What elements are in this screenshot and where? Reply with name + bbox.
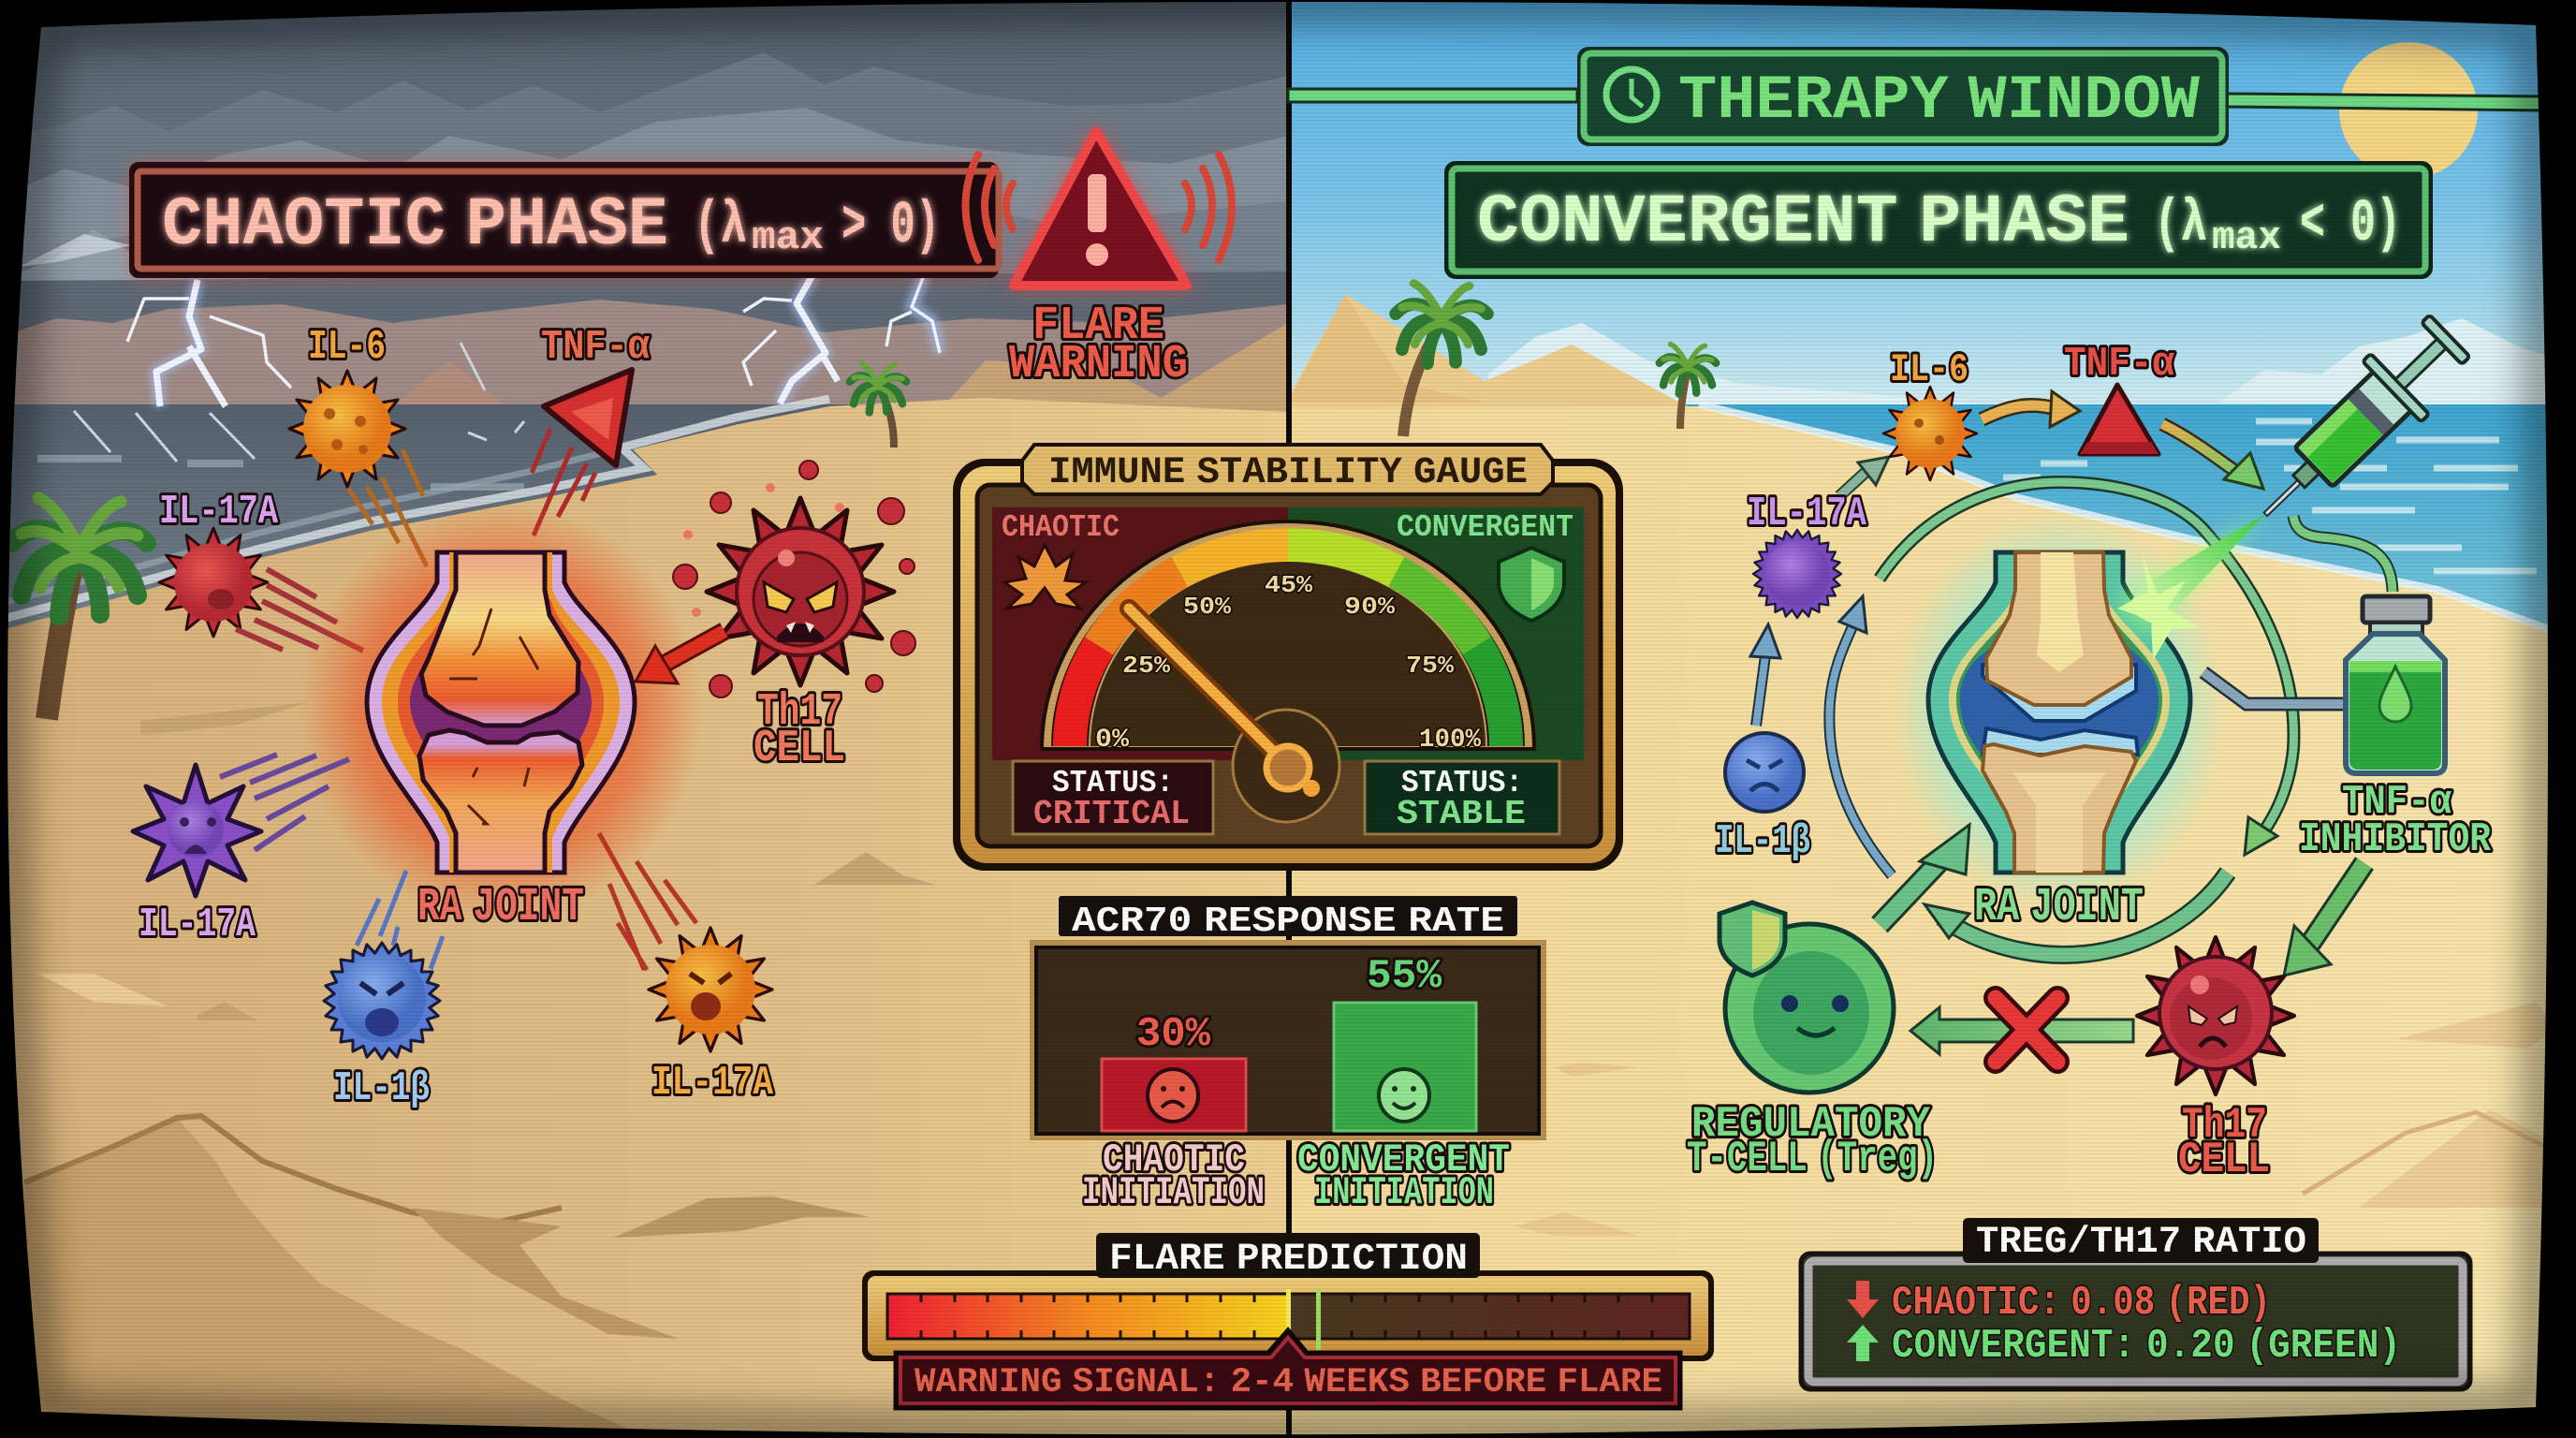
bar: convergent 55%: 55% bbox=[1367, 953, 1442, 1000]
label: chaotic initiation bbox=[1082, 1137, 1265, 1215]
joint: convergent RA joint bbox=[1893, 510, 2226, 913]
cytokine: IL-6 chaotic bbox=[289, 324, 427, 566]
banner: chaotic phase bbox=[131, 164, 999, 276]
label: convergent initiation: CONVERGENT bbox=[1297, 1137, 1510, 1182]
label: TNF-alpha inhibitor: TNF-α bbox=[2342, 779, 2452, 826]
icon: explosion bbox=[1004, 545, 1086, 609]
status: critical: STATUS: bbox=[1052, 766, 1174, 800]
banner: therapy window: THERAPY WINDOW bbox=[1678, 66, 2200, 136]
cytokine: IL-6 convergent: IL-6 bbox=[1890, 347, 1969, 392]
gauge display: 90% bbox=[1344, 593, 1395, 621]
text: convergent ratio: CONVERGENT: 0.20 (GREEN) bbox=[1892, 1323, 2401, 1370]
banner: convergent phase: (λ bbox=[2154, 191, 2207, 258]
panel: flare prediction bbox=[862, 1233, 1714, 1408]
heading: ratio: TREG/TH17 RATIO bbox=[1976, 1222, 2306, 1264]
icon: flare warning triangle bbox=[966, 124, 1232, 289]
text: chaotic ratio: CHAOTIC: 0.08 (RED) bbox=[1892, 1280, 2271, 1327]
label: RA joint chaotic: RA JOINT bbox=[417, 881, 584, 934]
bar: chaotic 30% bbox=[1102, 1011, 1246, 1131]
banner: convergent phase bbox=[1446, 163, 2431, 277]
gauge segments bbox=[1070, 545, 1506, 746]
cell: Th17 convergent bbox=[2137, 937, 2294, 1094]
cytokine: IL-17A red bbox=[159, 489, 363, 651]
banner: convergent phase: < 0) bbox=[2300, 191, 2401, 258]
cytokine: IL-1beta convergent bbox=[1715, 733, 1810, 865]
gauge display: CHAOTIC bbox=[1002, 510, 1120, 545]
gauge display: 50% bbox=[1183, 593, 1231, 621]
banner: convergent phase: max bbox=[2212, 215, 2281, 260]
cytokine: IL-17A convergent: IL-17A bbox=[1747, 491, 1866, 537]
status: stable bbox=[1365, 761, 1559, 834]
gauge display bbox=[992, 507, 1584, 760]
heading: ACR70: ACR70 RESPONSE RATE bbox=[1072, 902, 1504, 942]
banner: chaotic phase: (λ bbox=[694, 193, 747, 260]
cytokine: TNF-alpha convergent bbox=[2064, 341, 2175, 454]
label: regulatory T-cell: REGULATORY bbox=[1691, 1100, 1930, 1149]
lightning bolts bbox=[127, 275, 940, 406]
dunes bottom left bbox=[24, 1118, 632, 1438]
label: Th17 cell convergent bbox=[2178, 1101, 2270, 1184]
cytokine: IL-17A purple star bbox=[133, 755, 349, 948]
cell: Th17 chaotic bbox=[673, 461, 915, 697]
cell: regulatory T cell bbox=[1720, 902, 1894, 1093]
arrow: Treg to joint bbox=[1880, 825, 1969, 925]
gauge display: 25% bbox=[1122, 652, 1170, 680]
cytokine: TNF-alpha chaotic bbox=[532, 324, 651, 536]
cytokine: TNF-alpha convergent: TNF-α bbox=[2064, 341, 2175, 388]
label: flare warning bbox=[1009, 300, 1188, 391]
label: Th17 cell chaotic: CELL bbox=[754, 724, 845, 774]
label: regulatory T-cell: T-CELL (Treg) bbox=[1687, 1135, 1938, 1183]
status: stable: STATUS: bbox=[1401, 766, 1523, 800]
status: critical: CRITICAL bbox=[1033, 795, 1190, 833]
label: TNF-alpha inhibitor bbox=[2299, 779, 2492, 863]
label: Th17 cell chaotic bbox=[754, 687, 845, 774]
tubes to vial bbox=[2203, 516, 2393, 704]
cytokine: IL-1beta blue bbox=[324, 871, 443, 1112]
cytokine: IL-6 chaotic: IL-6 bbox=[308, 324, 386, 371]
cytokine: IL-17A convergent bbox=[1747, 491, 1866, 618]
sun bbox=[2339, 42, 2478, 179]
cytokine: IL-6 convergent bbox=[1883, 347, 1977, 480]
flare bar bbox=[887, 1289, 1690, 1350]
arrow: Th17 attacks joint bbox=[636, 631, 724, 683]
banner: chaotic phase: max bbox=[752, 215, 824, 260]
label: flare warning: WARNING bbox=[1009, 338, 1188, 391]
cytokine: IL-17A orange bbox=[599, 833, 773, 1107]
cytokine: TNF-alpha chaotic: TNF-α bbox=[541, 324, 651, 371]
panel: immune stability gauge bbox=[953, 445, 1623, 871]
warning signal callout bbox=[896, 1330, 1680, 1408]
label: Th17 cell convergent: CELL bbox=[2178, 1136, 2270, 1184]
cytokine: IL-17A orange: IL-17A bbox=[651, 1060, 773, 1107]
palm tree left background bbox=[850, 363, 906, 448]
bar: chaotic 30%: 30% bbox=[1136, 1011, 1211, 1058]
cytokine: IL-1beta blue: IL-1β bbox=[333, 1065, 430, 1112]
bar: convergent 55% bbox=[1334, 953, 1476, 1131]
beam: therapy beam into joint bbox=[2117, 510, 2269, 660]
palm tree right small bbox=[1660, 345, 1716, 429]
heading: gauge title: IMMUNE STABILITY GAUGE bbox=[1048, 452, 1528, 494]
gauge display: 45% bbox=[1265, 571, 1312, 599]
panel: Treg/Th17 ratio bbox=[1801, 1218, 2470, 1389]
icon: shield bbox=[1499, 548, 1564, 621]
cytokine: IL-17A red: IL-17A bbox=[159, 489, 278, 536]
palm tree right large bbox=[1396, 284, 1487, 436]
gauge display: 100% bbox=[1419, 726, 1481, 755]
icon: syringe bbox=[2236, 305, 2479, 544]
heading: flare prediction: FLARE PREDICTION bbox=[1109, 1239, 1468, 1281]
banner: chaotic phase: CHAOTIC PHASE bbox=[162, 186, 668, 264]
arrow: blocked Th17 to Treg bbox=[1910, 998, 2133, 1062]
arrow: inhibitor to Th17 bbox=[2284, 863, 2364, 976]
status: stable: STABLE bbox=[1397, 795, 1526, 833]
label: chaotic initiation: CHAOTIC bbox=[1103, 1137, 1245, 1182]
divider bbox=[1286, 0, 1292, 1438]
warning signal callout: WARNING SIGNAL: 2-4 WEEKS BEFORE FLARE bbox=[915, 1363, 1662, 1402]
arrow: feedback ring bbox=[1750, 391, 2293, 955]
label: regulatory T-cell bbox=[1687, 1100, 1938, 1183]
label: convergent initiation bbox=[1297, 1137, 1510, 1215]
cytokine: IL-17A purple star: IL-17A bbox=[139, 902, 256, 948]
label: convergent initiation: INITIATION bbox=[1314, 1170, 1494, 1215]
icon: vial bbox=[2346, 596, 2445, 773]
icon: red X bbox=[1996, 998, 2057, 1062]
palm tree left foreground bbox=[12, 498, 147, 719]
panel: left storm scene background bbox=[0, 0, 1289, 1438]
cytokine: IL-1beta convergent: IL-1β bbox=[1715, 818, 1810, 865]
label: Th17 cell chaotic: Th17 bbox=[757, 687, 842, 738]
status: critical bbox=[1013, 761, 1213, 834]
label: RA joint convergent: RA JOINT bbox=[1974, 881, 2144, 934]
banner: convergent phase: CONVERGENT PHASE bbox=[1477, 183, 2130, 261]
banner: therapy window bbox=[1288, 49, 2544, 144]
gauge display: 75% bbox=[1406, 652, 1454, 680]
panel: ACR70 response rate bbox=[1030, 896, 1546, 1140]
label: chaotic initiation: INITIATION bbox=[1082, 1170, 1265, 1215]
banner: chaotic phase: > 0) bbox=[842, 193, 940, 260]
icon: clock bbox=[1606, 69, 1657, 120]
gauge display: 0% bbox=[1095, 726, 1129, 755]
panel: right sunny scene background bbox=[1288, 0, 2576, 1438]
joint: chaotic RA joint bbox=[300, 501, 702, 922]
gauge display: CONVERGENT bbox=[1397, 510, 1573, 545]
label: flare warning: FLARE bbox=[1032, 300, 1164, 353]
label: TNF-alpha inhibitor: INHIBITOR bbox=[2299, 816, 2492, 863]
label: Th17 cell convergent: Th17 bbox=[2182, 1101, 2267, 1150]
gauge hub and needle bbox=[1129, 609, 1339, 822]
